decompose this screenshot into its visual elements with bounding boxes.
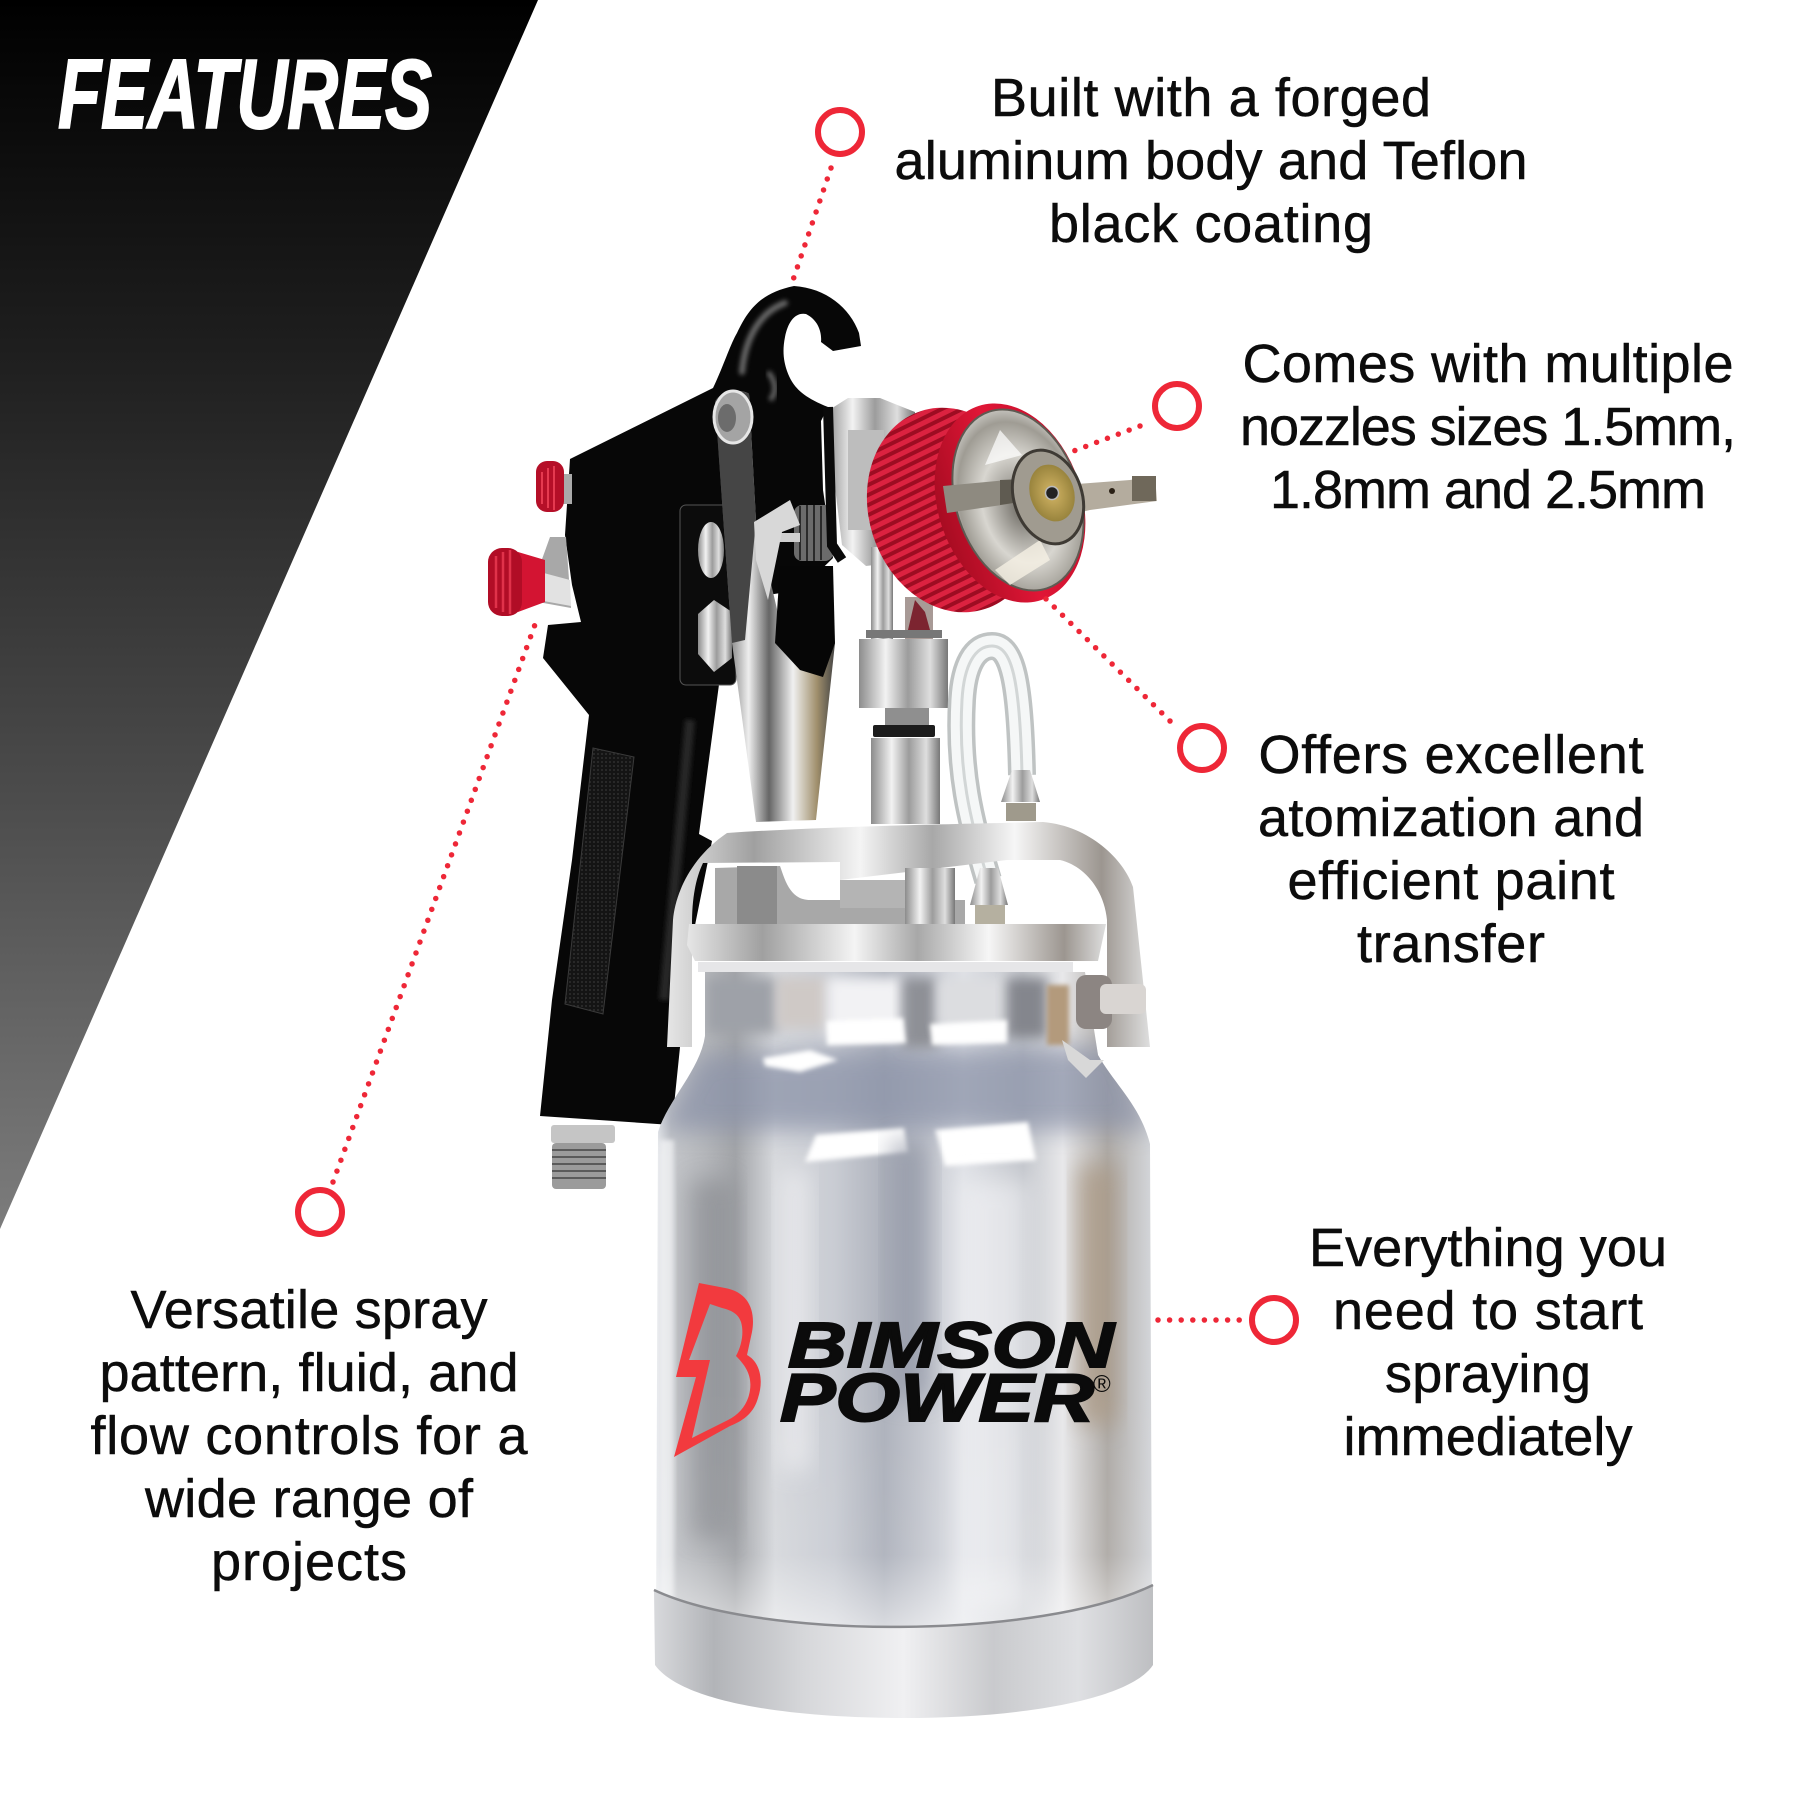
text <box>90 1280 528 1592</box>
cup bracket handle <box>667 822 1150 1047</box>
fluid stem and connectors <box>859 547 948 824</box>
text: Everything you <box>1309 1218 1667 1278</box>
logo: BIMSON POWER wordmark: ® <box>1093 1371 1111 1398</box>
grip shine <box>664 720 690 1000</box>
text: Offers excellent <box>1258 725 1644 785</box>
text <box>894 68 1528 254</box>
center ring <box>1001 441 1095 553</box>
text: 1.8mm and 2.5mm <box>1270 460 1706 520</box>
text: transfer <box>1357 914 1545 974</box>
callout: everything you need <box>1158 1218 1667 1467</box>
clear hose <box>961 646 1040 880</box>
brass nozzle <box>1022 459 1082 527</box>
text: need to start <box>1333 1281 1643 1341</box>
knurled band <box>841 385 1065 635</box>
cup base ring <box>654 1585 1153 1718</box>
air cap red ring <box>841 384 1157 635</box>
text: atomization and <box>1258 788 1644 848</box>
hose fitting <box>1001 770 1040 802</box>
neck panels <box>707 978 777 1033</box>
ring and leader <box>298 619 537 1234</box>
barrel chrome block <box>826 398 915 566</box>
text: Comes with multiple <box>1242 334 1734 394</box>
air inlet fitting <box>551 1125 615 1189</box>
text: flow controls for a <box>90 1406 528 1466</box>
callout: forged aluminum body <box>792 68 1528 283</box>
text <box>1258 725 1644 974</box>
text: black coating <box>1049 194 1373 254</box>
panel: diagonal black gradient wedge <box>0 0 538 1229</box>
callout: multiple nozzle sizes <box>1071 334 1736 520</box>
hose base fitting <box>970 868 1008 925</box>
grip texture panel <box>565 748 634 1014</box>
white highlights <box>827 1018 906 1045</box>
logo: BIMSON POWER wordmark: POWER <box>780 1360 1094 1436</box>
blue-grey shoulder band <box>660 1045 1150 1130</box>
trigger lever <box>714 391 835 822</box>
ring and leader <box>792 110 862 283</box>
text: wide range of <box>144 1469 474 1529</box>
valve recess with chrome nuts <box>680 505 833 685</box>
text: spraying <box>1385 1344 1591 1404</box>
lower post <box>871 738 940 824</box>
highlight on face <box>985 430 1022 465</box>
vertical bands <box>890 1140 930 1400</box>
product: spray gun and paint cup <box>488 286 1157 1718</box>
callout: atomization <box>1040 593 1644 974</box>
callout: versatile controls <box>90 619 537 1592</box>
black lock nut <box>873 725 935 737</box>
bracket latch block <box>715 866 965 925</box>
text: aluminum body and Teflon <box>894 131 1528 191</box>
text: immediately <box>1344 1407 1632 1467</box>
red control knobs <box>488 461 572 616</box>
text <box>1240 334 1736 520</box>
text: Built with a forged <box>991 68 1431 128</box>
lower knob <box>488 537 571 616</box>
glossy ring <box>910 384 1110 622</box>
chrome face <box>930 392 1106 608</box>
upper knob <box>536 461 572 512</box>
text: efficient paint <box>1288 851 1614 911</box>
ring and leader <box>1071 384 1199 452</box>
left horn <box>943 478 1029 513</box>
logo: BIMSON POWER wordmark: BIMSON <box>788 1309 1116 1381</box>
latch pin <box>1062 975 1146 1078</box>
right horn <box>1077 476 1157 513</box>
paint cup body <box>656 972 1156 1630</box>
title: FEATURES: FEATURES <box>58 39 432 149</box>
reflections <box>656 978 1156 1630</box>
text: projects <box>211 1532 407 1592</box>
ring and leader <box>1158 1298 1296 1342</box>
logo: lightning B <box>674 1283 761 1457</box>
hex nut <box>859 639 948 708</box>
logo: BIMSON POWER wordmark <box>780 1309 1116 1436</box>
lid rim <box>687 924 1106 972</box>
ring and leader <box>1040 593 1224 770</box>
text: pattern, fluid, and <box>100 1343 518 1403</box>
text: nozzles sizes 1.5mm, <box>1240 397 1736 457</box>
hook highlight <box>742 303 785 372</box>
text <box>1309 1218 1667 1467</box>
gun body and hook <box>540 286 861 1125</box>
text: Versatile spray <box>130 1280 488 1340</box>
